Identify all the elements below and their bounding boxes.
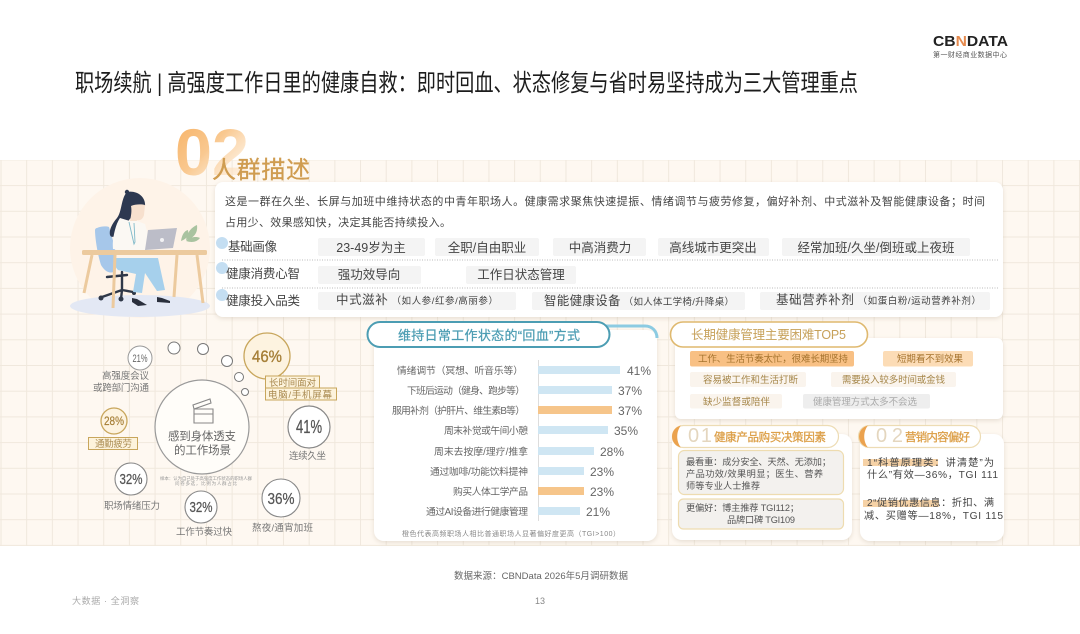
- bubble note: 样本：认为自己处于高强度工作状态的职场人群: [160, 475, 252, 482]
- bubble 28%: 28%: [104, 414, 124, 428]
- bubble 21%: 21%: [132, 353, 148, 365]
- bar values: 37%: [618, 384, 642, 398]
- page number: 13: [535, 596, 545, 606]
- trail dots: [168, 342, 248, 396]
- bar labels: 购买人体工学产品: [453, 485, 528, 498]
- panel: persona description: [215, 182, 1003, 317]
- row: 健康消费心智: [216, 262, 576, 284]
- chart note: 橙色代表高频职场人相比普通职场人显著偏好度更高（TGI>100）: [402, 529, 620, 538]
- TOP5 tags: 需要投入较多时间或金钱: [842, 374, 945, 386]
- marketing text: 什么”有效—36%，TGI 111: [867, 468, 998, 481]
- bar values: 23%: [590, 465, 614, 479]
- panel: marketing content preference: [858, 425, 1004, 541]
- row: 基础画像: [216, 237, 970, 256]
- bubble 21%: [93, 346, 152, 394]
- bar labels: 下班后运动（健身、跑步等）: [407, 384, 525, 397]
- purchase header: 01: [688, 425, 712, 447]
- marketing header: 营销内容偏好: [905, 430, 970, 444]
- row: 健康消费心智: 健康消费心智: [226, 266, 300, 281]
- row: 健康消费心智: 强功效导向: [338, 267, 400, 282]
- bubble 32% pace: 工作节奏过快: [176, 526, 232, 538]
- description text: 这是一群在久坐、长屏与加班中维持状态的中青年职场人。健康需求聚焦快速提振、情绪调节与疲劳修复，偏好补剂、中式滋补及智能健康设备；时间: [225, 194, 985, 208]
- row: 基础画像: 基础画像: [228, 240, 277, 254]
- row: 基础画像: 经常加班/久坐/倒班或上夜班: [798, 240, 954, 255]
- data source: 数据来源：CBNData 2026年5月调研数据: [454, 570, 628, 582]
- most valued box: 师等专业人士推荐: [686, 480, 760, 491]
- bubble 32% stress: 职场情绪压力: [104, 500, 160, 512]
- TOP5 tags: 短期看不到效果: [897, 353, 963, 365]
- highlights: [863, 459, 938, 466]
- TOP5 tags: 健康管理方式太多不会选: [813, 396, 917, 408]
- description text: 占用少、效果感知快，决定其能否持续投入。: [225, 215, 451, 229]
- row: 基础画像: 全职/自由职业: [448, 240, 526, 255]
- bubble 32% pace: 32%: [190, 500, 213, 516]
- row: 健康投入品类: 基础营养补剂 （如蛋白粉/运动营养补剂）: [776, 292, 981, 307]
- bubble 36%: [252, 479, 313, 534]
- bar values: 37%: [618, 404, 642, 418]
- TOP5 tags: 缺少监督或陪伴: [703, 396, 770, 408]
- marketing header: 02: [876, 425, 903, 447]
- logo: 第一财经商业数据中心: [933, 50, 1007, 59]
- row: 健康投入品类: [216, 289, 990, 310]
- most valued box: [678, 450, 844, 494]
- logo: CBNDATA: [933, 33, 1008, 50]
- panel: recovery methods bar chart: [368, 322, 657, 541]
- bubble 32% pace: [176, 491, 232, 538]
- bar values: 35%: [614, 424, 638, 438]
- bars: [538, 366, 620, 515]
- bubble 46%: 46%: [252, 347, 282, 366]
- bar labels: 服用补剂（护肝片、维生素B等）: [392, 404, 525, 417]
- marketing header: [858, 425, 980, 448]
- bubble 21%: 高强度会议: [102, 370, 149, 382]
- footer brand: 大数据 · 全洞察: [72, 595, 139, 606]
- bubble 46%: 电脑/手机屏幕: [268, 389, 332, 401]
- title: 职场续航 | 高强度工作日里的健康自救：即时回血、状态修复与省时易坚持成为三大管理重点: [75, 70, 858, 97]
- laptop: [145, 228, 177, 250]
- bar labels: 通过咖啡/功能饮料提神: [430, 465, 528, 478]
- row: 基础画像: 高线城市更突出: [669, 240, 757, 255]
- marketing text: [864, 456, 1003, 522]
- background grid panel: [0, 160, 1080, 546]
- row: 基础画像: 中高消费力: [569, 240, 631, 255]
- marketing text: 2“促销优惠信息：折扣、满: [867, 496, 994, 509]
- bubble note: 问卷多选，比例为人群占比: [175, 480, 238, 487]
- bubble 32% stress: 32%: [120, 472, 143, 488]
- row: 健康投入品类: 健康投入品类: [226, 293, 300, 308]
- preferred box: 更偏好：博主推荐 TGI112；: [686, 502, 799, 513]
- bubble 36%: 36%: [268, 491, 294, 508]
- bar values: 21%: [586, 505, 610, 519]
- bar labels: 通过AI设备进行健康管理: [426, 505, 528, 518]
- face: [130, 204, 145, 224]
- bubble 41%: [288, 406, 330, 462]
- row: 基础画像: 23-49岁为主: [336, 240, 406, 255]
- shirt: [113, 218, 150, 250]
- bar values: 23%: [590, 485, 614, 499]
- chair: [95, 226, 116, 273]
- row: 健康投入品类: 智能健康设备 （如人体工学椅/升降桌）: [544, 293, 734, 308]
- row: 健康投入品类: 中式滋补 （如人参/红参/高丽参）: [336, 292, 498, 307]
- bubble 32% stress: [104, 463, 160, 512]
- TOP5 tags: 工作、生活节奏太忙，很难长期坚持: [698, 353, 848, 365]
- TOP5 header: [670, 322, 868, 347]
- preferred box: [678, 499, 844, 529]
- bubble 36%: 熬夜/通宵加班: [252, 522, 313, 534]
- bubble 28%: 通勤疲劳: [95, 438, 132, 450]
- shoes: [132, 298, 147, 306]
- center bubble: 感到身体透支: [168, 429, 236, 443]
- bubble 41%: 41%: [296, 417, 322, 437]
- purchase header: 健康产品购买决策因素: [714, 430, 826, 444]
- bubble 46%: [244, 333, 336, 401]
- plant: [181, 225, 200, 242]
- marketing text: 减、买赠等—18%，TGI 115: [864, 509, 1003, 522]
- logo: [933, 33, 1008, 59]
- desk: [82, 250, 207, 255]
- bar labels: 情绪调节（冥想、听音乐等）: [397, 364, 523, 377]
- section number 02: 02: [175, 115, 249, 189]
- center bubble: 的工作场景: [174, 443, 231, 457]
- center bubble: [155, 380, 249, 474]
- most valued box: 最看重：成分安全、天然、无添加；: [686, 456, 831, 467]
- marketing text: 1“科普原理类：讲清楚”为: [867, 456, 994, 469]
- section heading: 人群描述: [212, 157, 310, 184]
- hair: [110, 192, 145, 237]
- pants: [113, 258, 165, 293]
- description text: [225, 194, 985, 229]
- bubble chart: work scenes: [88, 333, 336, 538]
- bar labels: 周末补觉或午间小憩: [444, 424, 528, 437]
- bar values: [586, 364, 651, 519]
- bar labels: 周末去按摩/理疗/推拿: [434, 445, 528, 458]
- TOP5 tags: 容易被工作和生活打断: [703, 374, 798, 386]
- bubble 21%: 或跨部门沟通: [93, 382, 149, 394]
- chart header: [368, 322, 610, 347]
- bubble 46%: 长时间面对: [269, 377, 316, 389]
- chart header: 维持日常工作状态的“回血”方式: [398, 328, 580, 343]
- bubble note: [160, 475, 252, 487]
- bar labels: [392, 364, 528, 518]
- TOP5 header: 长期健康管理主要困难TOP5: [691, 327, 846, 342]
- TOP5 tags: [690, 351, 973, 408]
- bar values: 41%: [627, 364, 651, 378]
- preferred box: 品牌口碑 TGI109: [727, 514, 795, 525]
- illustration: woman working at desk: [70, 178, 210, 318]
- bubble 28%: [88, 408, 138, 450]
- most valued box: 产品功效/效果明显；医生、营养: [686, 468, 823, 479]
- panel: long-term difficulties TOP5: [670, 322, 1003, 419]
- bar values: 28%: [600, 445, 624, 459]
- bubble 41%: 连续久坐: [289, 450, 326, 462]
- panel: purchase decision factors: [672, 425, 852, 540]
- row: 健康消费心智: 工作日状态管理: [477, 267, 565, 282]
- purchase header: [672, 425, 838, 448]
